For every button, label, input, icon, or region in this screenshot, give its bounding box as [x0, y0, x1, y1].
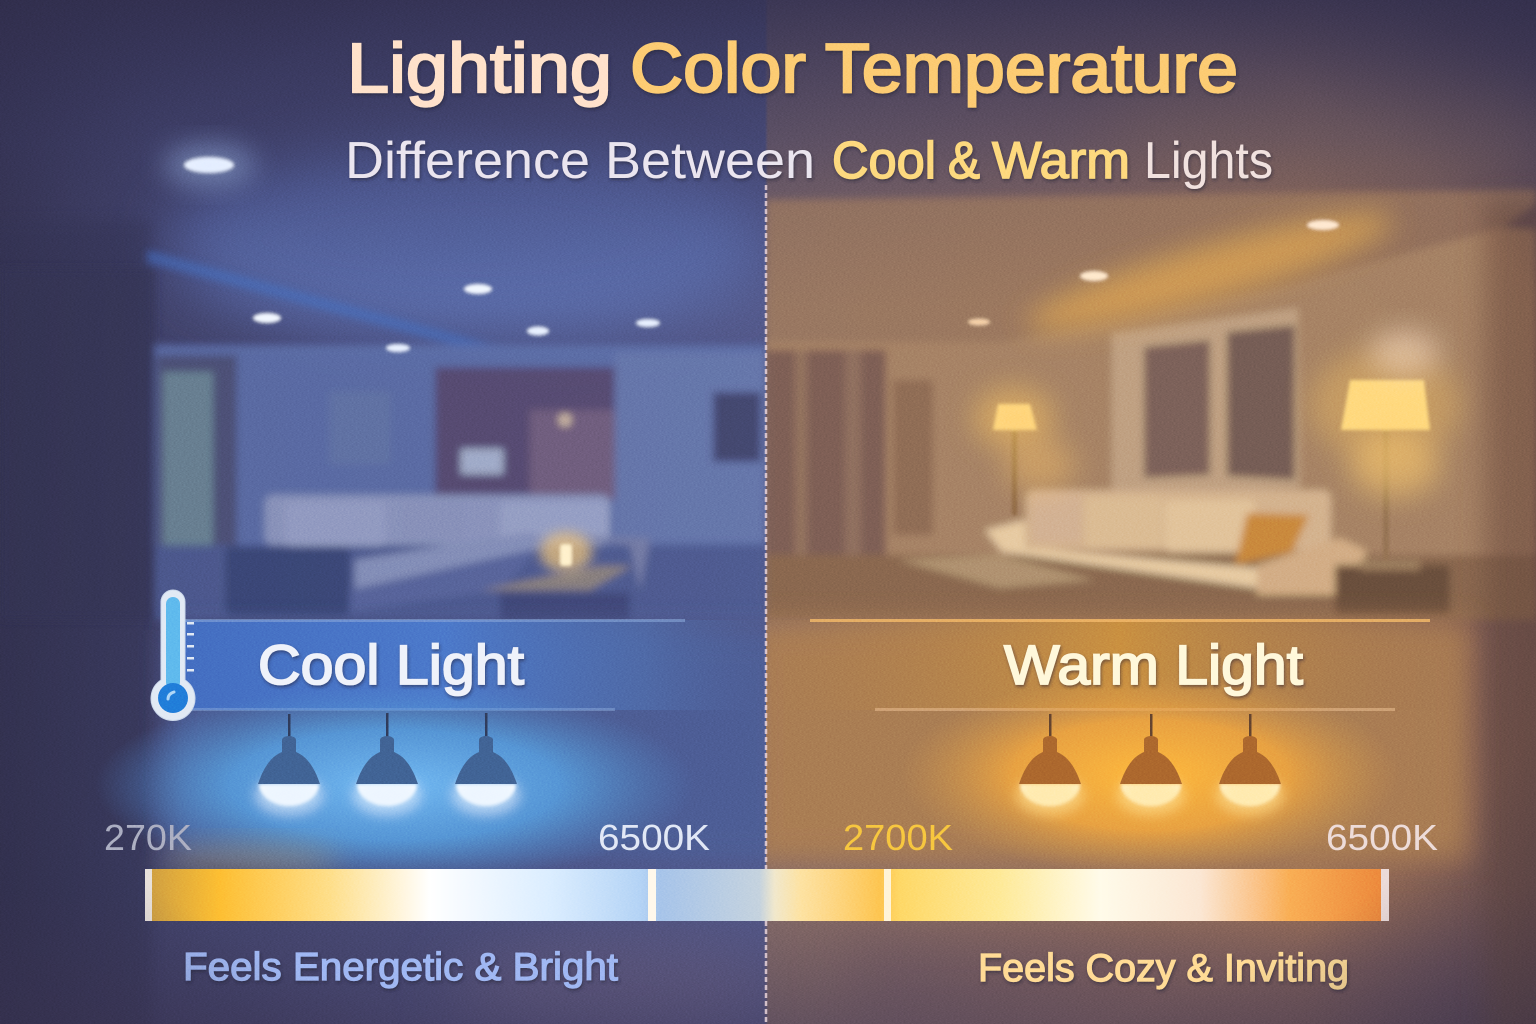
panel: cool light band	[185, 619, 760, 711]
icon: floor lamps	[974, 330, 1460, 560]
armchair	[225, 546, 350, 616]
subtitle	[345, 132, 1273, 190]
sofa back	[1026, 490, 1331, 550]
label: cool 6500K: 6500K	[598, 817, 710, 858]
temperature gradient bar	[145, 869, 1389, 921]
icon: thermometer	[151, 590, 195, 720]
title: Lighting	[347, 29, 612, 107]
left dark column	[148, 272, 153, 298]
sofa back	[265, 495, 610, 545]
subtitle: &	[948, 132, 980, 190]
coffee table	[898, 555, 1095, 588]
sofa seat	[355, 532, 560, 592]
label: 270K: 270K	[104, 817, 192, 858]
caption: cool: Feels Energetic & Bright	[183, 946, 618, 989]
cool glow behind lamps	[95, 685, 695, 885]
panel: warm light band	[770, 619, 1470, 711]
warm lower backdrop	[750, 622, 1470, 862]
subtitle: Difference Between	[345, 132, 815, 190]
walls	[766, 224, 1536, 559]
cool lower backdrop	[170, 630, 790, 865]
subtitle: Warm	[992, 132, 1130, 190]
door	[893, 380, 933, 535]
panel: warm room scene	[766, 190, 1536, 1024]
caption: warm: Feels Cozy & Inviting	[978, 947, 1349, 990]
right edge shade	[1485, 200, 1536, 1024]
warm ceiling	[766, 190, 1536, 342]
floor	[155, 545, 766, 620]
icon: warm pendant lamps	[1016, 714, 1284, 815]
title: Color Temperature	[630, 29, 1238, 107]
table	[584, 534, 652, 586]
curtains	[766, 350, 886, 555]
icon: cool pendant lamps	[255, 713, 520, 815]
ceiling lights	[164, 145, 1339, 352]
divider line	[765, 185, 767, 1024]
panel: cool room scene	[143, 248, 766, 622]
side table	[1335, 565, 1450, 615]
subtitle: Lights	[1144, 132, 1273, 190]
window frame	[1112, 308, 1300, 496]
ceiling beam	[143, 248, 484, 348]
walls	[150, 340, 766, 550]
subtitle: Cool	[832, 132, 936, 190]
warm glow behind lamps	[900, 675, 1400, 875]
yellowish tint above bar left	[160, 844, 340, 876]
heading: warm light: Warm Light	[1004, 633, 1303, 696]
heading: cool light: Cool Light	[258, 633, 524, 696]
title	[347, 29, 1238, 107]
label: 2700K: 2700K	[843, 817, 953, 858]
amber ceiling glow	[1020, 195, 1400, 349]
pillow	[1235, 513, 1309, 565]
door frame	[157, 355, 237, 573]
label: warm 6500K: 6500K	[1326, 817, 1438, 858]
floor	[766, 555, 1536, 620]
dark alcove	[435, 367, 615, 500]
sofa seat	[985, 520, 1257, 588]
